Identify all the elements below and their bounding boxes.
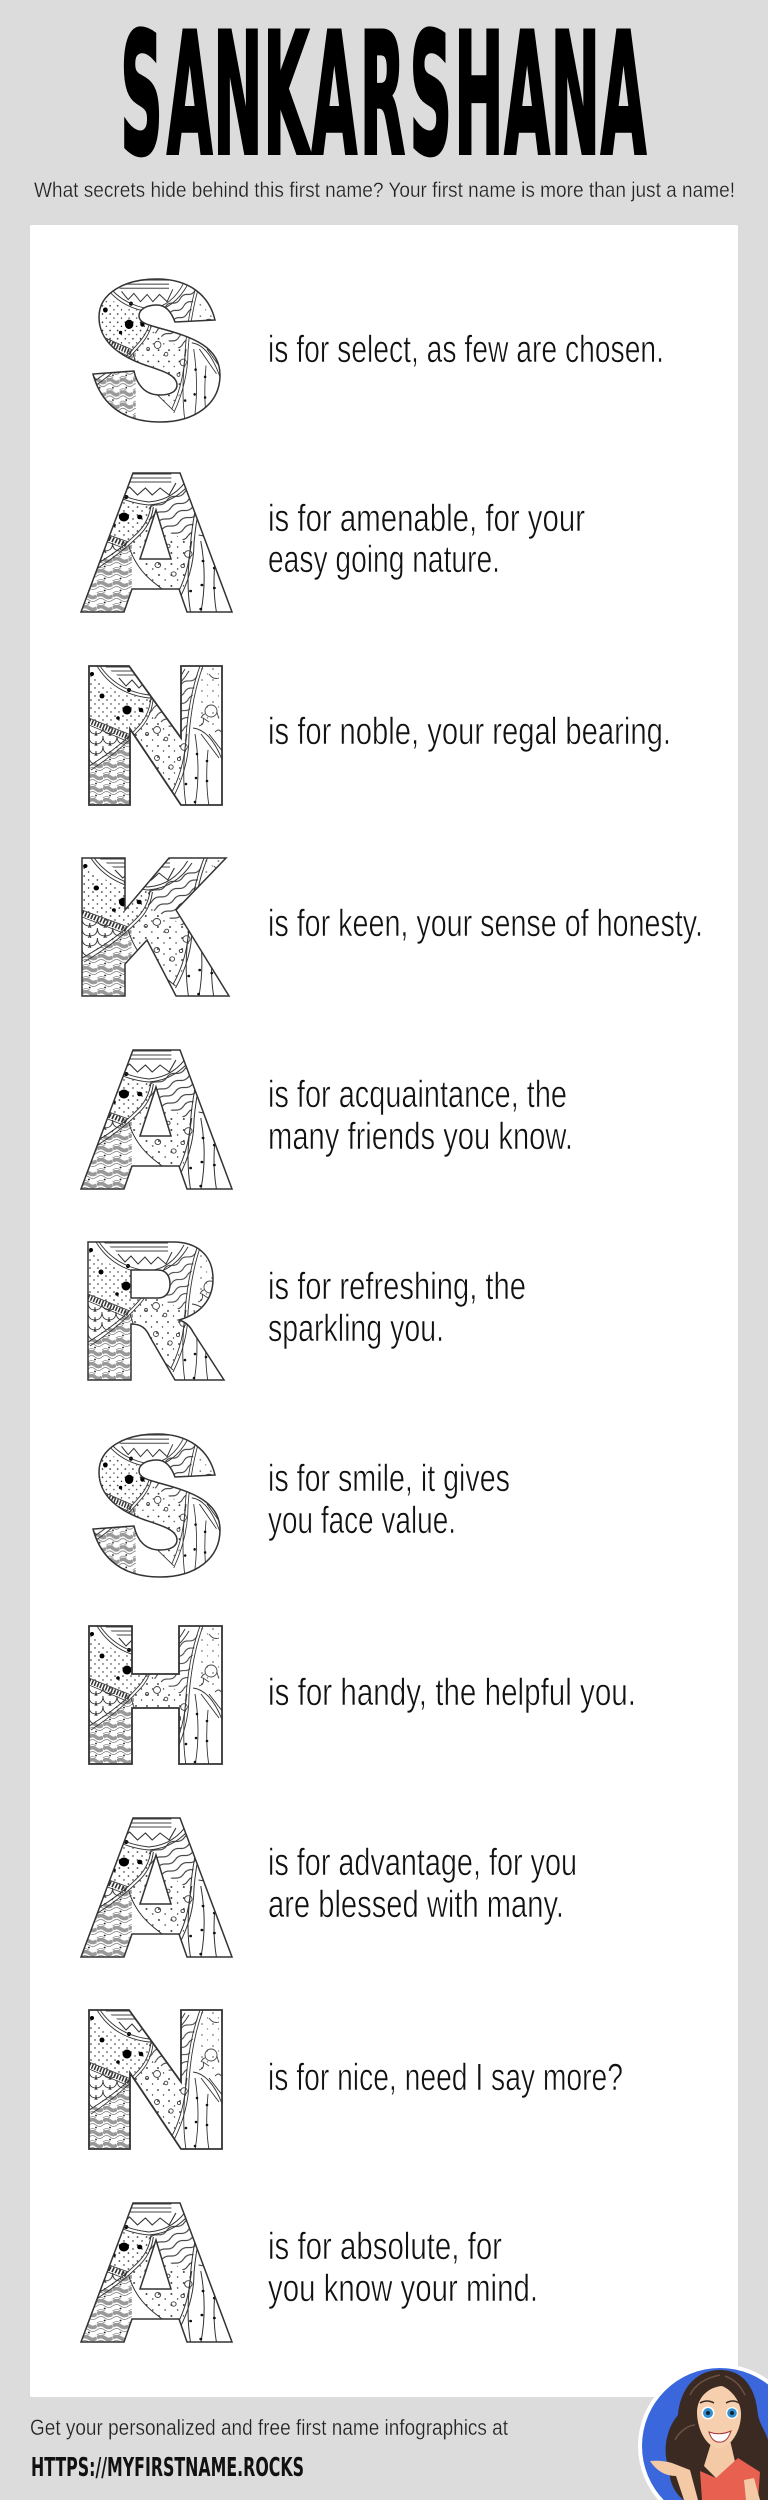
text: acquaintance: many friends you know. (268, 1116, 573, 1158)
row: S is for smile (93, 1434, 510, 1578)
footer text: Get your personalized and free first name infographics at (30, 2415, 508, 2440)
icon: letter S (93, 279, 220, 423)
row: S is for select (93, 279, 664, 423)
text: absolute (268, 2226, 538, 2310)
text: acquaintance: is for acquaintance, the (268, 1074, 567, 1116)
footer url: HTTPS://MYFIRSTNAME.ROCKS (31, 2453, 304, 2483)
row: R is for refreshing (88, 1242, 526, 1382)
icon: letter R (88, 1242, 224, 1382)
avatar: cartoon woman in circle (638, 2364, 768, 2500)
row: N is for noble (89, 666, 671, 806)
text: nice: is for nice, need I say more? (268, 2057, 623, 2099)
text: refreshing: is for refreshing, the (268, 1266, 526, 1308)
icon: letter A (81, 2203, 232, 2343)
icon: letter A (81, 1818, 232, 1958)
row: H is for handy (89, 1626, 636, 1766)
icon: letter A (81, 1050, 232, 1190)
icon: letter A (81, 473, 232, 613)
icon: letter H (89, 1626, 223, 1766)
text: refreshing: sparkling you. (268, 1308, 444, 1350)
text: smile (268, 1458, 510, 1542)
text: acquaintance (268, 1074, 573, 1158)
icon: letter K (82, 858, 229, 998)
row: A is for absolute (81, 2203, 538, 2343)
text: advantage (268, 1842, 577, 1926)
text: handy: is for handy, the helpful you. (268, 1672, 636, 1714)
text: advantage: are blessed with many. (268, 1884, 564, 1926)
text: advantage: is for advantage, for you (268, 1842, 577, 1884)
row: A is for amenable (81, 473, 585, 613)
text: refreshing (268, 1266, 526, 1350)
text: amenable: is for amenable, for your (268, 498, 585, 540)
icon: letter N (89, 666, 223, 806)
text: absolute: is for absolute, for (268, 2226, 502, 2268)
title: SANKARSHANA (120, 0, 646, 193)
text: absolute: you know your mind. (268, 2268, 538, 2310)
row: N is for nice (89, 2010, 623, 2150)
icon: letter N (89, 2010, 223, 2150)
text: amenable (268, 498, 585, 581)
text: amenable: easy going nature. (268, 539, 500, 581)
row: A is for acquaintance (81, 1050, 573, 1190)
text: smile: you face value. (268, 1500, 456, 1542)
row: A is for advantage (81, 1818, 577, 1958)
text: smile: is for smile, it gives (268, 1458, 510, 1500)
row: K is for keen (82, 858, 703, 998)
icon: letter S (93, 1434, 220, 1578)
